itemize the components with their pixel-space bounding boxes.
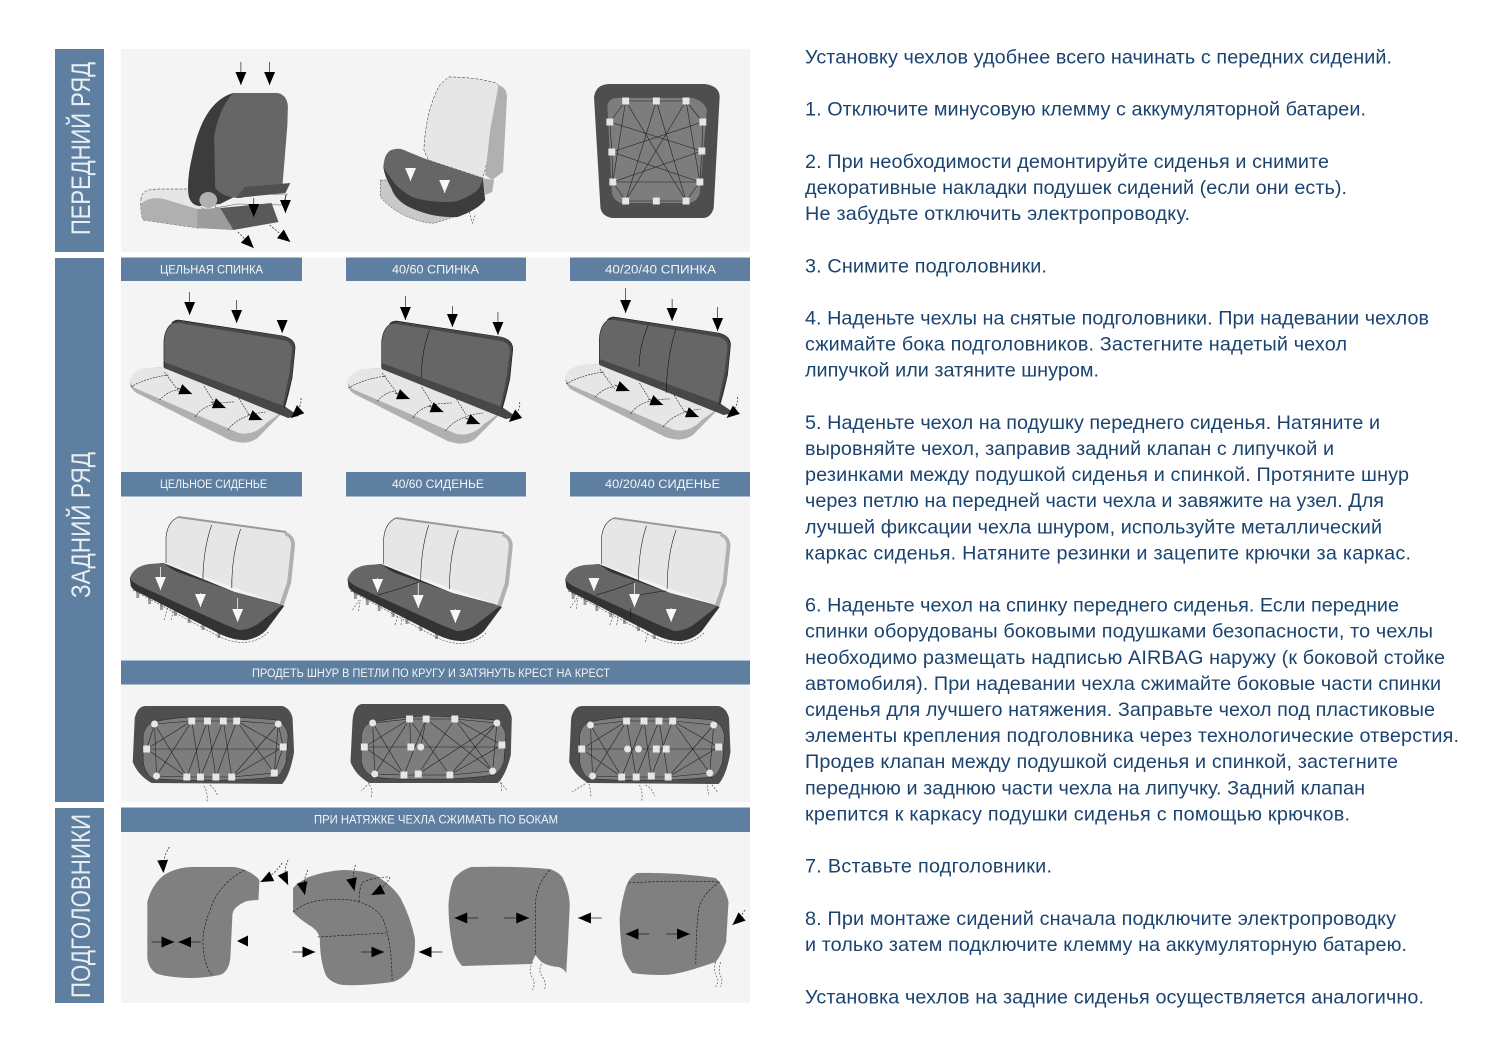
side tab: rear row bbox=[55, 258, 104, 802]
text: step 1: 1. Отключите минусовую клемму с аккумуляторной батареи. bbox=[805, 99, 1366, 121]
rear row, headrest illustrations bbox=[130, 288, 745, 990]
illustration: 40/60 seat lacing bbox=[350, 704, 512, 798]
panel: front row background bbox=[121, 49, 750, 252]
illustration: headrest 2 bbox=[285, 860, 443, 985]
illustration: solid seat lacing bbox=[133, 706, 294, 802]
header bar: solid backrest: ЦЕЛЬНАЯ СПИНКА bbox=[160, 264, 263, 276]
header bar: solid seat bbox=[121, 472, 302, 496]
illustration: solid seat bbox=[130, 517, 295, 642]
text: step 6 bbox=[805, 595, 1459, 825]
text: step 4: липучкой или затяните шнуром. bbox=[805, 360, 1099, 382]
text: step 5: выровняйте чехол, заправив задний клапан с липучкой и bbox=[805, 438, 1334, 460]
text: step 6: 6. Наденьте чехол на спинку переднего сиденья. Если передние bbox=[805, 595, 1399, 617]
text: step 8: и только затем подключите клемму на аккумуляторную батарею. bbox=[805, 934, 1407, 956]
text: step 4: 4. Наденьте чехлы на снятые подголовники. При надевании чехлов bbox=[805, 308, 1429, 330]
header bar: lacing instruction bbox=[121, 660, 750, 684]
side tab: headrests bbox=[55, 808, 104, 1003]
header bar: solid seat: ЦЕЛЬНОЕ СИДЕНЬЕ bbox=[160, 479, 267, 491]
text: step 2: декоративные накладки подушек сидений (если они есть). bbox=[805, 177, 1347, 199]
illustration: solid backrest bbox=[130, 292, 301, 443]
header bar: 40/60 seat: 40/60 СИДЕНЬЕ bbox=[392, 479, 484, 491]
text: step 5: резинками между подушкой сиденья и спинкой. Протяните шнур bbox=[805, 464, 1409, 486]
text: step 6: спинки оборудованы боковыми подушками безопасности, то чехлы bbox=[805, 621, 1433, 643]
illustration: headrest 3 bbox=[448, 867, 602, 990]
text: step 6: переднюю и заднюю части чехла на липучку. Задний клапан bbox=[805, 777, 1365, 799]
arrow: headrest 1 inner side bbox=[237, 936, 248, 946]
text: step 5: лучшей фиксации чехла шнуром, используйте металлический bbox=[805, 516, 1382, 538]
header bar: solid backrest bbox=[121, 258, 302, 281]
text: step 5: каркас сиденья. Натяните резинки и зацепите крючки за каркас. bbox=[805, 542, 1411, 564]
illustration: front seat backrest cover bbox=[141, 62, 290, 248]
header bar: 40/20/40 backrest: 40/20/40 СПИНКА bbox=[605, 264, 716, 276]
header bar: 40/20/40 backrest bbox=[570, 258, 750, 281]
text: step 5: через петлю на передней части чехла и завяжите на узел. Для bbox=[805, 490, 1384, 512]
text: step 6: элементы крепления подголовника через технологические отверстия. bbox=[805, 725, 1459, 747]
text: step 2: 2. При необходимости демонтируйте сиденья и снимите bbox=[805, 151, 1329, 173]
illustration: 40/20/40 backrest bbox=[565, 288, 738, 440]
text: step 2: Не забудьте отключить электропроводку. bbox=[805, 203, 1190, 225]
text: step 6: необходимо размещать надписью AIRBAG наружу (к боковой стойке bbox=[805, 647, 1445, 669]
illustration: 40/60 backrest bbox=[348, 296, 520, 444]
illustration: 40/20/40 seat lacing bbox=[569, 706, 730, 802]
illustration: front seat lacing frame bbox=[594, 84, 720, 218]
text: step 5 bbox=[805, 412, 1411, 564]
text: step 2 bbox=[805, 151, 1347, 225]
text: step 4 bbox=[805, 308, 1429, 382]
text: step 6: автомобиля). При надевании чехла сжимайте боковые части спинки bbox=[805, 673, 1441, 695]
header bar: 40/20/40 seat bbox=[570, 472, 750, 496]
illustration: 40/20/40 seat bbox=[565, 518, 730, 643]
text: step 8: 8. При монтаже сидений сначала подключите электропроводку bbox=[805, 908, 1396, 930]
header bar: 40/20/40 seat: 40/20/40 СИДЕНЬЕ bbox=[605, 479, 720, 491]
panel: rear row background bbox=[121, 258, 750, 802]
panel: headrests background bbox=[121, 808, 750, 1003]
header bar: 40/60 seat bbox=[346, 472, 526, 496]
side tab: rear row: ЗАДНИЙ РЯД bbox=[66, 452, 96, 598]
illustration: front seat cushion cover bbox=[380, 77, 507, 223]
header bar: lacing instruction: ПРОДЕТЬ ШНУР В ПЕТЛИ ПО КРУГУ И ЗАТЯНУТЬ КРЕСТ НА КРЕСТ bbox=[252, 668, 610, 680]
text: step 3: 3. Снимите подголовники. bbox=[805, 255, 1047, 277]
illustration: headrest 1 bbox=[147, 847, 282, 978]
text: step 6: сиденья для лучшего натяжения. Заправьте чехол под пластиковые bbox=[805, 699, 1435, 721]
illustration: headrest 4 bbox=[620, 873, 745, 987]
header bar: 40/60 backrest bbox=[346, 258, 526, 281]
illustration: 40/60 seat bbox=[348, 518, 513, 643]
text: step 8 bbox=[805, 908, 1407, 956]
side tab: front row: ПЕРЕДНИЙ РЯД bbox=[66, 62, 96, 235]
front row illustrations bbox=[141, 62, 720, 248]
header bar: headrest instruction: ПРИ НАТЯЖКЕ ЧЕХЛА СЖИМАТЬ ПО БОКАМ bbox=[314, 814, 558, 826]
header bar: headrest instruction bbox=[121, 808, 750, 832]
text: step 6: Продев клапан между подушкой сиденья и спинкой, застегните bbox=[805, 751, 1398, 773]
text: step 4: сжимайте бока подголовников. Застегните надетый чехол bbox=[805, 334, 1347, 356]
header bar: 40/60 backrest: 40/60 СПИНКА bbox=[392, 264, 479, 276]
text: step 6: крепится к каркасу подушки сиденья с помощью крючков. bbox=[805, 803, 1350, 825]
side tab: front row bbox=[55, 49, 104, 252]
text: closing note: Установка чехлов на задние сиденья осуществляется аналогично. bbox=[805, 986, 1424, 1008]
side tab: headrests: ПОДГОЛОВНИКИ bbox=[66, 814, 96, 998]
text: intro: Установку чехлов удобнее всего начинать с передних сидений. bbox=[805, 46, 1392, 68]
text: step 5: 5. Наденьте чехол на подушку переднего сиденья. Натяните и bbox=[805, 412, 1380, 434]
text: step 7: 7. Вставьте подголовники. bbox=[805, 856, 1052, 878]
